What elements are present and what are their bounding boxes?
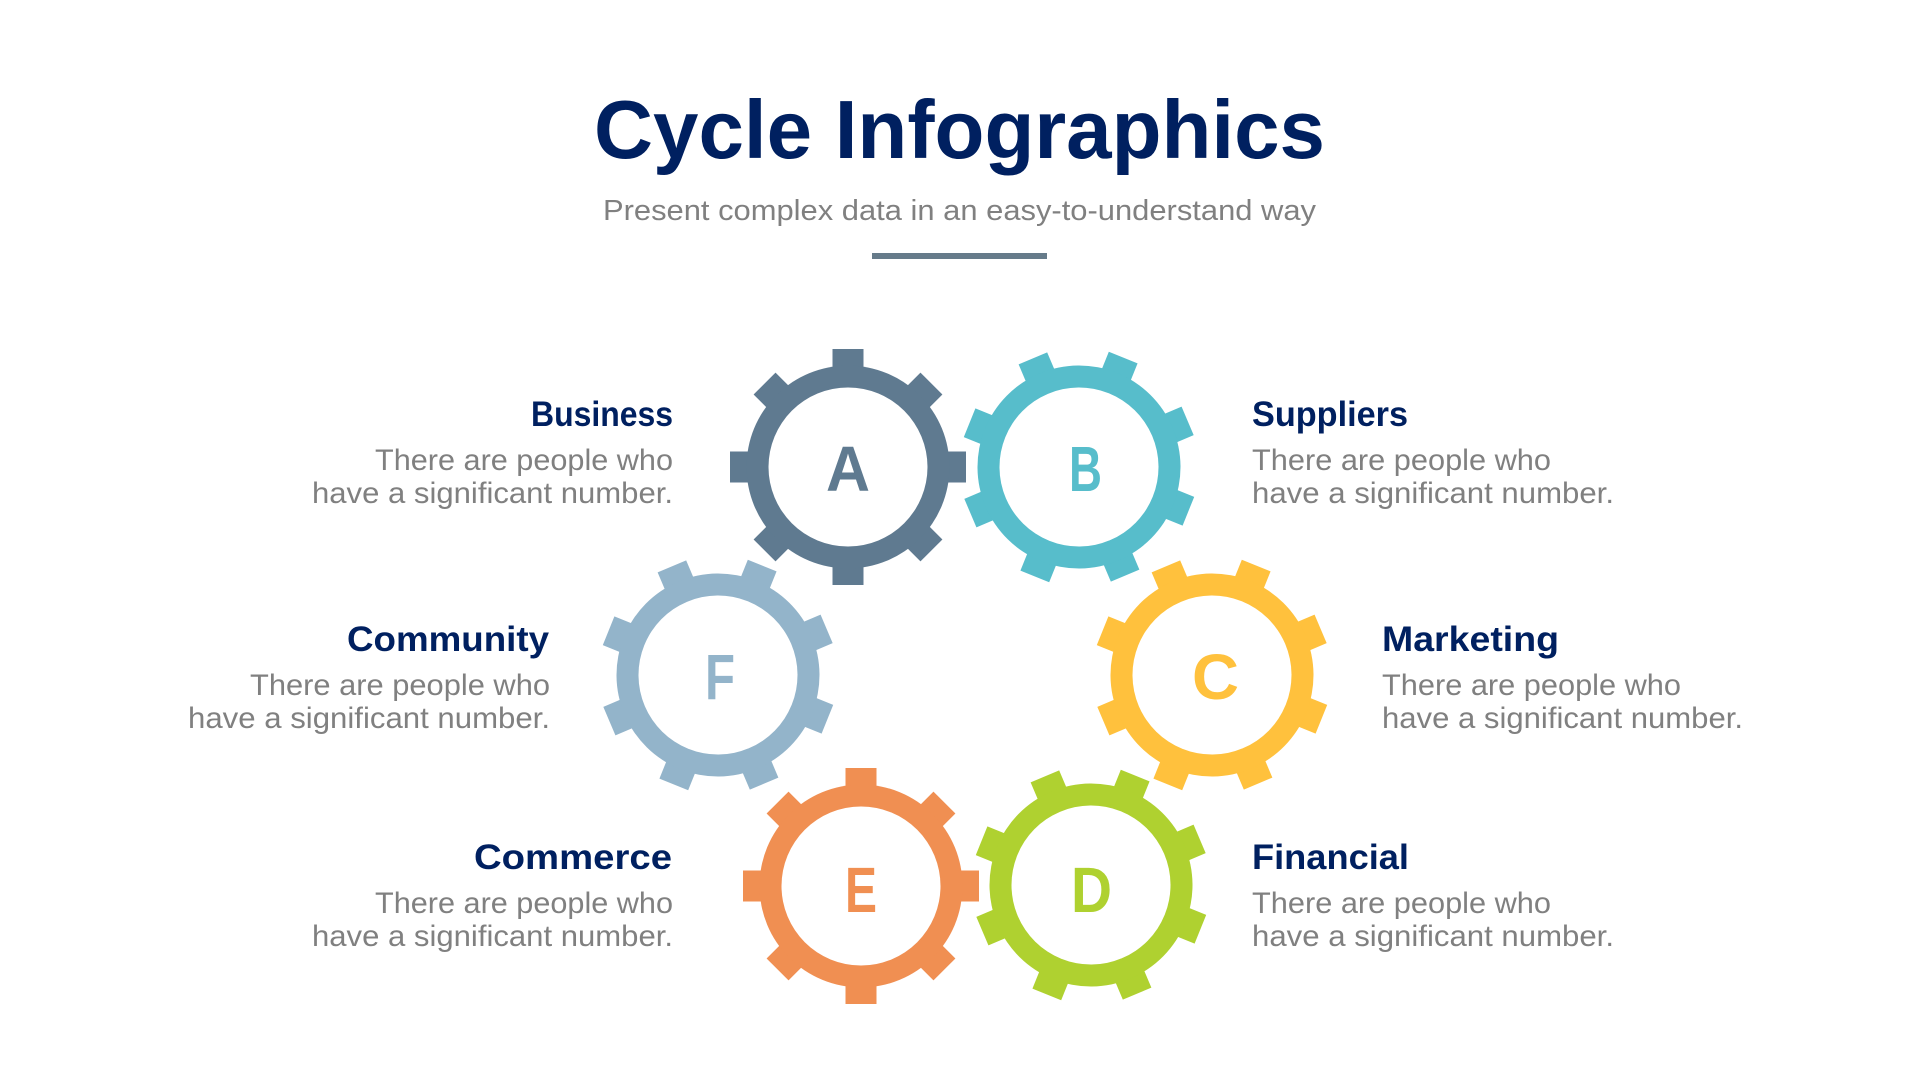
divider rule bbox=[872, 253, 1047, 259]
title: Cycle Infographics bbox=[594, 83, 1325, 176]
text block: Commerce bbox=[312, 838, 673, 953]
text block: Business: Business bbox=[531, 395, 673, 434]
text block: Financial: have a significant number. bbox=[1252, 920, 1614, 953]
text block: Financial: Financial bbox=[1252, 838, 1409, 877]
letter A: A bbox=[826, 433, 870, 505]
text block: Community: Community bbox=[347, 620, 550, 659]
letter E: E bbox=[845, 854, 877, 926]
gear E bbox=[743, 768, 979, 1004]
gear C bbox=[1058, 521, 1366, 829]
text block: Marketing: Marketing bbox=[1382, 620, 1559, 659]
text block: Suppliers bbox=[1252, 395, 1614, 510]
gear B bbox=[925, 313, 1233, 621]
text block: Marketing bbox=[1382, 620, 1743, 735]
text block: Financial bbox=[1252, 838, 1614, 953]
text block: Community: have a significant number. bbox=[188, 702, 550, 735]
text block: Marketing: have a significant number. bbox=[1382, 702, 1743, 735]
letter B: B bbox=[1069, 433, 1102, 505]
text block: Business bbox=[312, 395, 673, 510]
letter F: F bbox=[705, 641, 735, 713]
text block: Suppliers: have a significant number. bbox=[1252, 477, 1614, 510]
text block: Financial: There are people who bbox=[1252, 887, 1551, 920]
text block: Commerce: Commerce bbox=[474, 838, 672, 877]
text block: Business: There are people who bbox=[375, 444, 673, 477]
text block: Marketing: There are people who bbox=[1382, 669, 1681, 702]
letter D: D bbox=[1071, 854, 1112, 926]
gear A bbox=[730, 349, 966, 585]
text block: Commerce: There are people who bbox=[375, 887, 673, 920]
text block: Community bbox=[188, 620, 550, 735]
text block: Business: have a significant number. bbox=[312, 477, 673, 510]
text block: Suppliers: There are people who bbox=[1252, 444, 1551, 477]
letter C: C bbox=[1192, 641, 1239, 713]
text block: Suppliers: Suppliers bbox=[1252, 395, 1408, 434]
text block: Community: There are people who bbox=[250, 669, 550, 702]
subtitle: Present complex data in an easy-to-understand way bbox=[603, 195, 1317, 227]
gear D bbox=[937, 731, 1245, 1039]
gear F bbox=[564, 521, 872, 829]
text block: Commerce: have a significant number. bbox=[312, 920, 673, 953]
